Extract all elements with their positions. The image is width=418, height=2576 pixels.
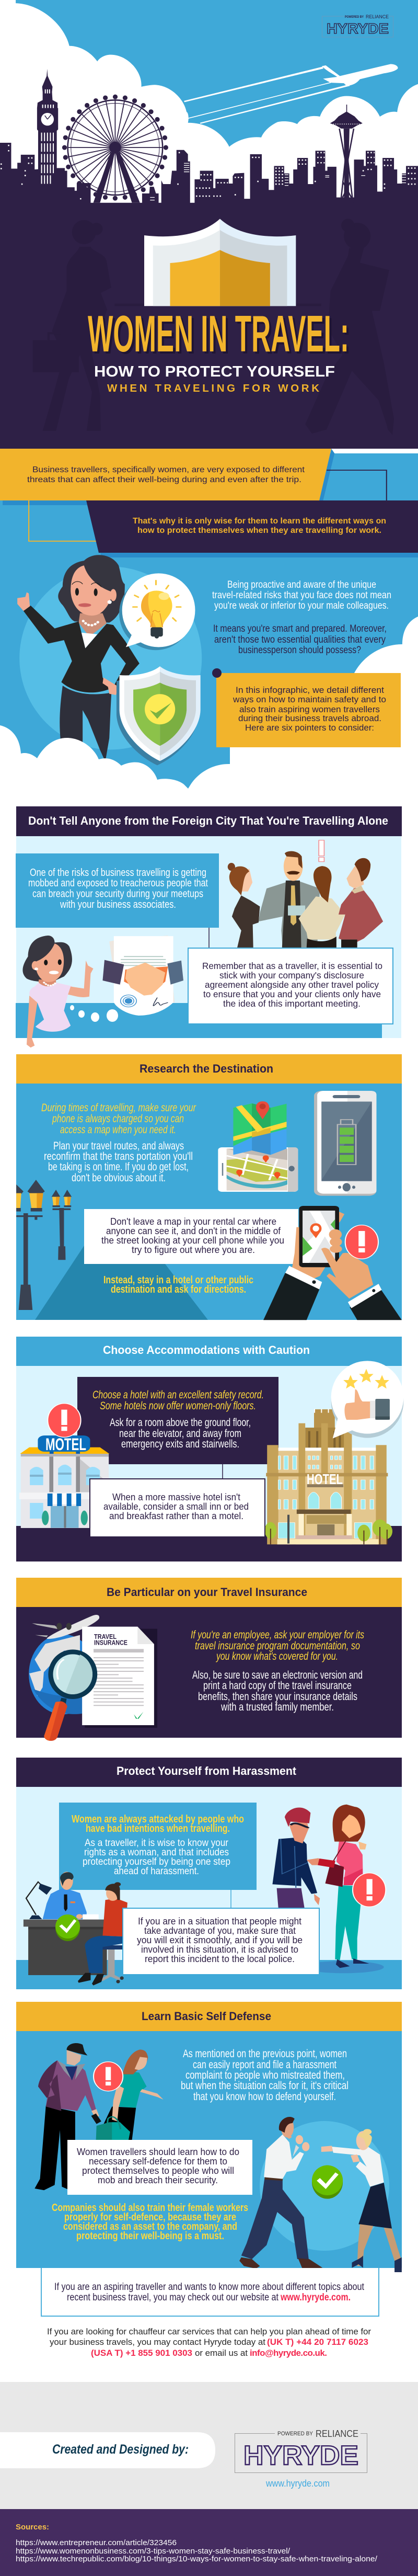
text box: risks of business travelling: mobbed and exposed to treacherous people that (28, 877, 208, 889)
credit pill: Created and Designed by: (52, 2442, 189, 2457)
heading (16, 1758, 402, 1787)
text box: risks of business travelling: with your business associates. (60, 899, 176, 910)
text box: women attacked: protecting yourself by being one step (83, 1856, 230, 1867)
text box: stick to company disclosure: to ensure that you and your clients only have (203, 989, 381, 999)
section 3 background (16, 1366, 402, 1561)
panel: sources (0, 2509, 418, 2576)
logo: Hyryde top: POWERED BY (345, 16, 364, 19)
text: keep phone charged: access a map when you need it. (60, 1124, 176, 1136)
icon: globe, document and magnifier (29, 1615, 157, 1741)
icon: alert badge motel (48, 1404, 81, 1437)
panel: section 2 research the destination (16, 1054, 402, 1320)
icon: hands holding phone (263, 1206, 402, 1320)
silhouette: woman with briefcase (33, 220, 111, 431)
text box: women attacked: Women are always attacked by people who (72, 1814, 244, 1825)
section 2 background (16, 1084, 402, 1320)
label: hotel sign: HOTEL (307, 1471, 343, 1487)
text box: learn self-defence: mob and breach their security. (98, 2175, 218, 2185)
text box: stick to company disclosure (188, 948, 393, 1024)
title: HOW TO PROTECT YOURSELF (94, 363, 335, 380)
text band: business travellers (0, 449, 331, 500)
panel: section 4 travel insurance (16, 1578, 402, 1741)
icon: alert badge stalker (94, 2062, 123, 2091)
text box: hotel safety record: Ask for a room above the ground floor, (110, 1417, 251, 1429)
text: being proactive (212, 579, 391, 611)
text box: report incident: you will exit it smoothly, and if you will be (137, 1935, 303, 1945)
text: being proactive: travel-related risks that you face does not mean (212, 590, 391, 601)
text: plan travel routes (44, 1140, 193, 1184)
text box: consider small inn: When a more massive hotel isn't (112, 1492, 240, 1502)
text: contact details: info@hyryde.co.uk. (250, 2348, 327, 2358)
text box: risks of business travelling (16, 853, 219, 928)
credit pill (0, 2432, 215, 2468)
callout: website link box: recent business travel, you may check out our website at (67, 2292, 279, 2303)
callout: six pointers: In this infographic, we detail different (236, 686, 384, 695)
figure: woman pointing (22, 936, 94, 1047)
text: report and defend: complaint to people who mistreated them, (185, 2069, 345, 2081)
title (88, 305, 351, 394)
city skyline (0, 143, 418, 449)
text box: learn self-defence: protect themselves to people who will (82, 2165, 234, 2176)
callout: six pointers: during their business travels abroad. (238, 714, 381, 723)
text: stay in hotel: Instead, stay in a hotel or other public (103, 1274, 253, 1286)
panel: sources: https://www.entrepreneur.com/article/323456 (16, 2539, 177, 2547)
heading (16, 1337, 402, 1366)
panel: section 6 self defense (16, 2002, 402, 2272)
panel: sources: https://www.techrepublic.com/blog/10-things/10-ways-for-women-to-stay-safe-when-traveling-alone/ (16, 2555, 378, 2563)
text box: women attacked (59, 1803, 257, 1890)
text box: women attacked: As a traveller, it is wise to know your (85, 1838, 229, 1849)
text box: women attacked: have bad intentions when travelling. (86, 1823, 230, 1834)
text box: hotel safety record: Choose a hotel with an excellent safety record. (92, 1389, 264, 1401)
section 4 background (16, 1607, 402, 1738)
text: ask your employer (191, 1629, 364, 1662)
logo: Hyryde footer (235, 2429, 367, 2472)
silhouette: woman with folder (305, 219, 394, 435)
text box: don't leave a map: anyone can see it, and don't in the middle of (106, 1226, 281, 1236)
figure: man and woman fighting (239, 2117, 402, 2272)
text box: don't leave a map (84, 1209, 298, 1264)
heading (16, 2002, 402, 2031)
icon: map and tablet (218, 1101, 298, 1192)
icon: hotel building (265, 1409, 392, 1544)
text: save an electronic version: Also, be sure to save an electronic version and (192, 1669, 363, 1681)
text box: report incident: If you are in a situation that people might (138, 1916, 301, 1927)
figure: pickpocket and victim (272, 1805, 369, 1968)
icon: lightbulb bubble (119, 573, 195, 650)
text: companies should train: properly for self-defence, because they are (64, 2212, 236, 2223)
icon: large shield (114, 219, 321, 306)
heading (16, 806, 402, 836)
icon: street lamps (16, 1180, 72, 1310)
heading: Research the Destination (140, 1062, 273, 1075)
icon: Big Ben (37, 69, 58, 192)
label: travel insurance document: TRAVEL (94, 1633, 117, 1640)
text: ask your employer: If you're an employee, ask your employer for its (191, 1629, 364, 1641)
text box: report incident: report this incident to the local police. (145, 1954, 295, 1964)
text: companies should train (52, 2202, 248, 2242)
icon: green shield (117, 666, 201, 765)
icon: Space Needle (330, 105, 363, 203)
text: save an electronic version (192, 1669, 363, 1713)
logo: Hyryde top (322, 14, 393, 37)
clouds: intro bottom (0, 617, 418, 816)
heading: Choose Accommodations with Caution (103, 1343, 310, 1357)
text box: stick to company disclosure: the idea of this important meeting. (223, 998, 361, 1009)
text: being proactive: Being proactive and aware of the unique (227, 579, 376, 590)
text: companies should train: considered as an asset to the company, and (63, 2221, 237, 2232)
text box: don't leave a map: try to figure out where you are. (132, 1245, 255, 1255)
link: website: www.hyryde.com (265, 2478, 330, 2489)
intro background (0, 449, 418, 789)
text: being proactive: you're weak or inferior to your male colleagues. (214, 600, 389, 611)
text box: report incident (123, 1908, 319, 1975)
panel: section 1 don't tell anyone (16, 806, 402, 1047)
text: keep phone charged (41, 1102, 196, 1136)
text: ask your employer: you know what's covered for you. (215, 1650, 338, 1662)
callout: six pointers: Here are six pointers to consider: (245, 723, 374, 733)
text: plan travel routes: don't be obvious about it. (72, 1172, 166, 1184)
text box: consider small inn (90, 1479, 265, 1537)
text: contact details (47, 2327, 371, 2358)
text box: learn self-defence: necessary self-defence for them to (89, 2156, 227, 2167)
text: save an electronic version: print a hard copy of the travel insurance (203, 1680, 352, 1692)
text: save an electronic version: benefits, then share your insurance details (198, 1691, 357, 1703)
logo: Hyryde footer: RELIANCE (316, 2429, 358, 2439)
text: companies should train: protecting their well-being is a must. (76, 2230, 224, 2242)
text band: why it is wise (86, 500, 418, 553)
callout: website link box (41, 2268, 379, 2316)
text band: why it is wise: how to protect themselves when they are travelling for work. (137, 526, 381, 535)
text box: report incident: involved in this situation, it is advised to (141, 1944, 298, 1955)
text box: women attacked: ahead of harassment. (114, 1866, 199, 1877)
text: plan travel routes: reconfirm that the trans portation you'll (44, 1150, 193, 1162)
text band: business travellers: Business travellers, specifically women, are very exposed to different (32, 465, 305, 474)
icon: rating bubble with thumb (331, 1361, 403, 1439)
section 5 background (16, 1787, 402, 1989)
text: stay in hotel: destination and ask for directions. (111, 1284, 246, 1295)
icon: motel building (19, 1435, 109, 1528)
text box: hotel safety record: Some hotels now offer women-only floors. (100, 1400, 256, 1412)
text box: learn self-defence (67, 2140, 252, 2195)
figure: police desk (24, 1872, 127, 1986)
text: smart and prepared: It means you're smart and prepared. Moreover, (213, 623, 387, 634)
heading (16, 1054, 402, 1084)
text box: report incident: take advantage of you, make sure that (144, 1925, 296, 1936)
text: keep phone charged: During times of travelling, make sure your (41, 1102, 196, 1114)
section 1 background (16, 836, 401, 1038)
panel: introduction (0, 449, 418, 816)
label: travel insurance document: INSURANCE (94, 1639, 127, 1646)
logo: Hyryde footer: POWERED BY (277, 2431, 314, 2437)
heading: Be Particular on your Travel Insurance (107, 1586, 307, 1599)
text: report and defend: that you know how to defend yourself. (193, 2091, 336, 2103)
text box: consider small inn: and breakfast rather than a motel. (109, 1511, 243, 1521)
text box: hotel safety record: near the elevator, and away from (119, 1428, 241, 1440)
text: contact details: or email us at (195, 2348, 248, 2358)
text box: consider small inn: available, consider a small inn or bed (103, 1501, 249, 1512)
callout: six pointers: ways on how to maintain safety and to (233, 695, 386, 704)
logo: Hyryde top: HYRYDE (327, 20, 389, 37)
text box: stick to company disclosure: agreement alongside any other travel policy (205, 979, 379, 990)
text: report and defend: but when the situation calls for it, it's critical (181, 2080, 349, 2092)
thought dots (70, 1005, 118, 1022)
text band: business travellers: threats that can affect their well-being during and even after the trip. (27, 475, 301, 484)
heading (16, 1578, 402, 1607)
text box: risks of business travelling: One of the risks of business travelling is getting (30, 867, 206, 879)
label: travel insurance document (94, 1633, 127, 1646)
icon: handshake agreement (102, 936, 183, 1016)
panel: section 5 harassment (16, 1758, 402, 1989)
callout: website link box: www.hyryde.com. (280, 2292, 351, 2303)
text: smart and prepared (213, 623, 387, 656)
text box: risks of business travelling: can breach your security during your meetups (32, 888, 203, 899)
text: plan travel routes: Plan your travel routes, and always (53, 1140, 184, 1152)
sky and clouds (16, 0, 418, 147)
logo: Hyryde top: RELIANCE (366, 14, 389, 19)
heading: Protect Yourself from Harassment (117, 1764, 297, 1777)
heading: Don't Tell Anyone from the Foreign City That You're Travelling Alone (28, 814, 388, 827)
label: motel sign: MOTEL (45, 1435, 86, 1454)
text box: stick to company disclosure: Remember that as a traveller, it is essential to (202, 961, 382, 971)
text: stay in hotel (103, 1274, 253, 1295)
text: report and defend: As mentioned on the previous point, women (183, 2048, 347, 2060)
text box: hotel safety record: emergency exits and stairwells. (121, 1438, 239, 1450)
text: companies should train: Companies should also train their female workers (52, 2202, 248, 2214)
panel: hero banner (0, 0, 418, 449)
icon: smartphone full battery (314, 1091, 376, 1196)
text: keep phone charged: phone is always charged so you can (52, 1113, 184, 1125)
icon: green check badge (312, 2165, 343, 2199)
panel: footer credits (0, 2382, 418, 2509)
text: contact details: (UK T) +44 20 7117 6023 (267, 2337, 368, 2347)
text: contact details: your business travels, you may contact Hyryde today at (50, 2337, 265, 2347)
panel: sources: Sources: (16, 2523, 49, 2532)
text: save an electronic version: with a trusted family member. (220, 1701, 334, 1713)
heading: Learn Basic Self Defense (142, 2010, 271, 2023)
panel: section 3 accommodations (16, 1337, 403, 1561)
text: contact details: (USA T) +1 855 901 0303 (91, 2348, 192, 2358)
panel: sources: https://www.womenonbusiness.com/3-tips-women-stay-safe-business-travel/ (16, 2547, 291, 2556)
figure: stalker and woman (34, 2043, 164, 2190)
text box: stick to company disclosure: stick with your company's disclosure (219, 970, 364, 981)
text box: women attacked: rights as a woman, and that includes (84, 1847, 229, 1858)
text band: why it is wise: That's why it is only wise for them to learn the different ways on (133, 517, 386, 526)
callout: six pointers: also train aspiring women travellers (239, 705, 380, 714)
text: report and defend: can easily report and file a harassment (193, 2059, 336, 2071)
icon: airplane with contrails (184, 64, 398, 124)
icon: alert badge (345, 1225, 378, 1259)
text: plan travel routes: be taking is on time. If you do get lost, (48, 1161, 189, 1173)
text: smart and prepared: aren't those two essential qualities that every (214, 634, 386, 645)
text: report and defend (181, 2048, 349, 2103)
icon: alert badge harassment (353, 1873, 386, 1907)
text box: don't leave a map: the street looking at your cell phone while you (101, 1235, 284, 1246)
callout: six pointers (212, 668, 401, 747)
text: contact details: If you are looking for chauffeur car services that can help you plan ahead of time for (47, 2327, 371, 2336)
title: WHEN TRAVELING FOR WORK (107, 382, 319, 394)
callout: website link box: If you are an aspiring traveller and wants to know more about different topics about (54, 2282, 365, 2293)
section 6 background (16, 2031, 402, 2268)
icon: Ferris wheel (64, 97, 166, 203)
figure: businesswoman thumbs up (17, 555, 140, 761)
figure: business group (228, 840, 383, 948)
text box: hotel safety record (77, 1377, 278, 1464)
text box: learn self-defence: Women travellers should learn how to do (77, 2147, 239, 2157)
text: smart and prepared: businessperson should possess? (238, 645, 361, 656)
text box: don't leave a map: Don't leave a map in your rental car where (110, 1216, 276, 1227)
logo: Hyryde footer: HYRYDE (243, 2441, 358, 2471)
text: ask your employer: travel insurance program documentation, so (195, 1640, 360, 1652)
